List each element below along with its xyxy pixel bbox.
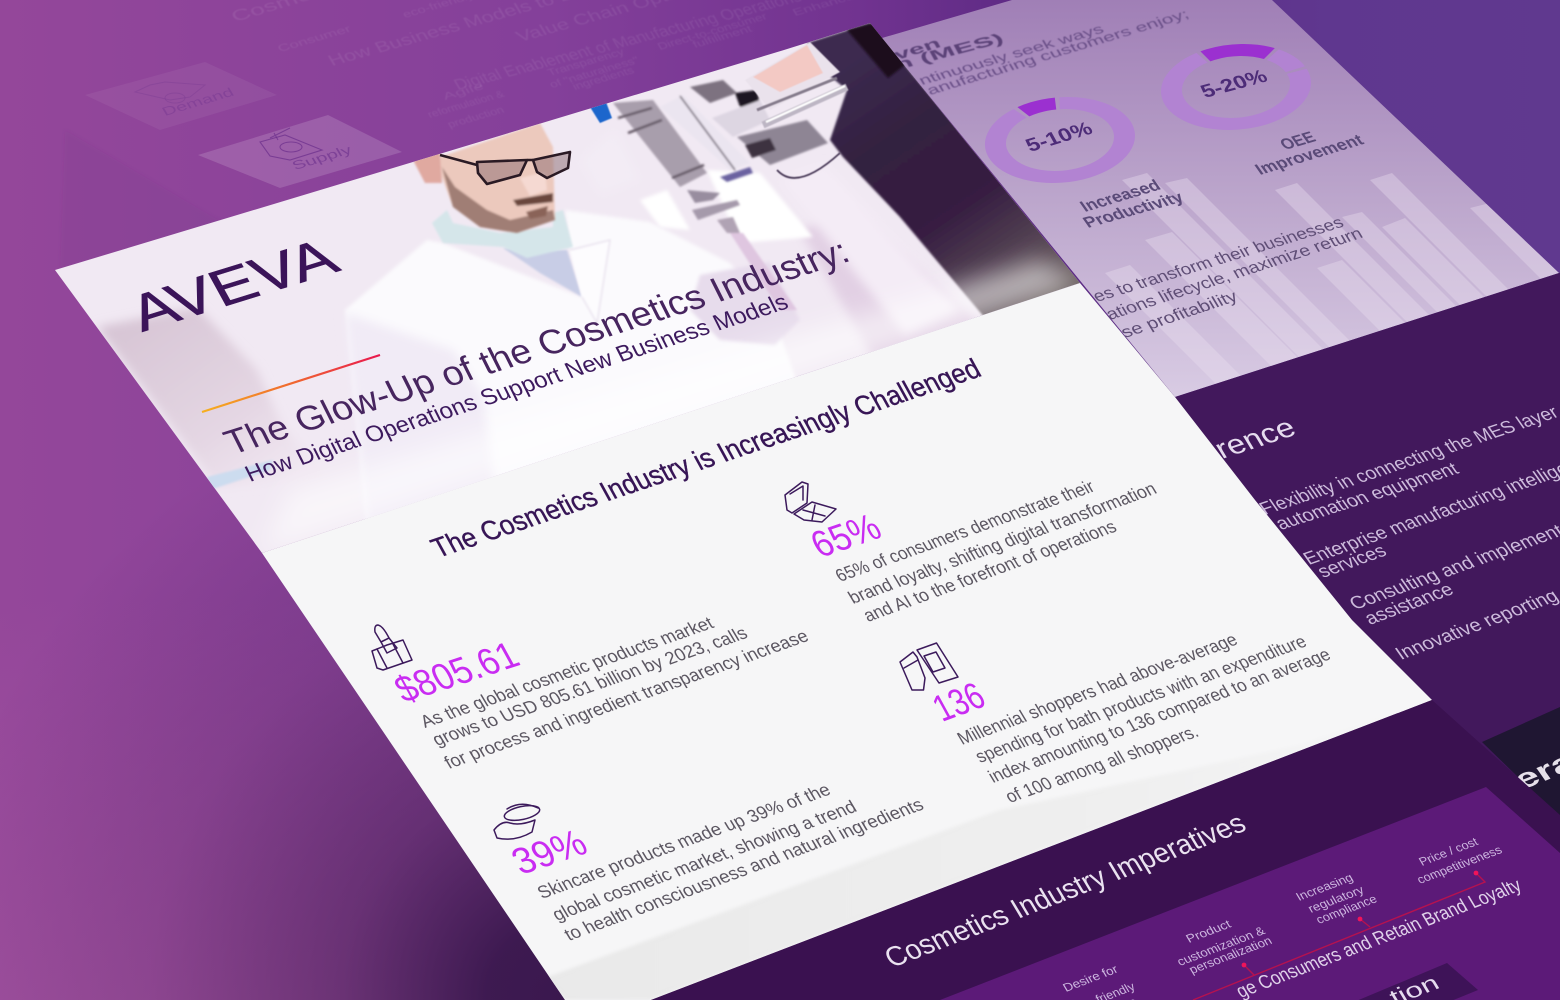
heading fragments: n (MES) xyxy=(890,30,1007,73)
stat: consumers: 65% of consumers demonstrate their xyxy=(831,476,1098,586)
imperative labels: customization & xyxy=(1175,924,1268,969)
capability list: Innovative reporting xyxy=(1391,585,1560,663)
donut: 5-20% xyxy=(1151,37,1321,137)
ghost sheet behind the main page xyxy=(60,0,857,300)
photo: face xyxy=(413,123,555,233)
ghost small labels: fulfillment xyxy=(691,24,755,51)
photo: face mask xyxy=(432,210,573,258)
photo: lab coat xyxy=(346,210,798,520)
stat: skincare xyxy=(494,779,927,945)
stat: millennial spending: index amounting to 136 compared to an average xyxy=(984,644,1334,787)
ghost card: demand xyxy=(85,62,277,130)
panel: lavender MES page xyxy=(882,0,1559,397)
label: OEE improvement: OEE xyxy=(1277,129,1319,154)
imperative labels: compliance xyxy=(1314,893,1380,927)
heading: Cosmetics Industry Imperatives xyxy=(879,807,1251,973)
capability list: automation equipment xyxy=(1271,459,1462,534)
imperative labels: Increasing xyxy=(1294,871,1356,904)
capability list xyxy=(1255,401,1560,663)
paragraph: ations lifecycle, maximize return xyxy=(1102,224,1366,324)
imperative connector line xyxy=(1193,873,1485,1000)
imperative labels: Desire for xyxy=(1061,963,1121,995)
stat: millennial spending: of 100 among all shoppers. xyxy=(1001,721,1202,807)
dark label box xyxy=(1330,963,1478,1000)
imperative labels: Product xyxy=(1184,917,1234,946)
heading: The Cosmetics Industry is Increasingly Challenged xyxy=(425,353,986,563)
stat: skincare: 39% xyxy=(504,821,594,882)
banner title: ge Consumers and Retain Brand Loyalty xyxy=(1232,875,1526,1000)
stat: market size: As the global cosmetic products market xyxy=(416,613,717,732)
photo: lab machine xyxy=(613,80,828,310)
heading fragments: ven xyxy=(891,36,944,64)
ghost card: supply xyxy=(198,115,402,188)
label: increased productivity xyxy=(1077,177,1188,232)
ghost small labels: of "naturalness" xyxy=(548,55,642,91)
subtitle: How Digital Operations Support New Business Models xyxy=(240,288,792,487)
stat: skincare: Skincare products made up 39% of the xyxy=(533,779,834,903)
heading fragments: anufacturing customers enjoy; xyxy=(923,6,1192,98)
donut: 5-10%: 5-10% xyxy=(1021,117,1097,156)
ghost headings xyxy=(228,0,805,94)
icon: cream jar xyxy=(494,803,541,839)
capability list: assistance xyxy=(1360,578,1457,628)
label: increased productivity: Increased xyxy=(1077,177,1164,216)
ghost small labels: Transparency xyxy=(546,47,627,79)
ghost small labels: reformulation & xyxy=(426,89,507,121)
heading fragments xyxy=(890,6,1192,98)
ghost headings: Digital Enablement of Manufacturing Operations xyxy=(451,0,805,94)
gradient rule xyxy=(202,355,380,412)
heading fragments: ntinuously seek ways xyxy=(915,21,1107,88)
stat: market size: grows to USD 805.61 billion by 2023, calls xyxy=(428,623,751,750)
inner panel xyxy=(940,787,1560,1000)
stat: skincare: to health consciousness and natural ingredients xyxy=(560,794,927,945)
photo: benchtop fade xyxy=(262,260,1080,553)
capability list: Flexibility in connecting the MES layer xyxy=(1255,401,1560,519)
title: The Glow-Up of the Cosmetics Industry: xyxy=(218,233,856,462)
stat: market size: $805.61 xyxy=(387,633,526,710)
ghost card: supply: Supply xyxy=(289,142,356,173)
heading: difference: rence xyxy=(1208,411,1301,464)
photo: room and window xyxy=(97,130,1000,490)
icon: lipstick xyxy=(372,625,412,670)
paragraph: se profitability xyxy=(1117,287,1242,342)
stat: millennial spending: 136 xyxy=(925,674,992,729)
ghost small labels: ingredients xyxy=(571,65,637,93)
ghost small labels: production xyxy=(446,105,507,131)
photo: dark corner xyxy=(807,22,1085,318)
imperative labels: Price / cost xyxy=(1417,835,1481,869)
ghost small labels xyxy=(276,0,857,131)
label: OEE improvement: Improvement xyxy=(1252,132,1368,179)
imperative labels: regulatory xyxy=(1306,883,1367,916)
panel: main page white section xyxy=(262,283,1432,1000)
stat: millennial spending: spending for bath products with an expenditure xyxy=(971,631,1310,767)
stat: millennial spending xyxy=(900,629,1334,807)
imperative labels xyxy=(1061,835,1505,1000)
stat: market size: for process and ingredient transparency increase xyxy=(440,626,812,773)
photo: arm, pipes and cable xyxy=(590,42,847,178)
icon: bottles xyxy=(900,643,958,690)
stat: consumers: 65% xyxy=(803,505,888,565)
stat: millennial spending: Millennial shoppers had above-average xyxy=(953,629,1241,749)
stat: consumers: and AI to the forefront of operations xyxy=(859,516,1120,626)
background bar pattern xyxy=(1106,173,1559,384)
ghost small labels: Direct-to-consumer xyxy=(656,11,770,53)
label: increased productivity: Productivity xyxy=(1080,189,1188,232)
stat: consumers: brand loyalty, shifting digital transformation xyxy=(844,478,1160,608)
dark block xyxy=(1482,707,1560,818)
imperative labels: personalization xyxy=(1187,934,1275,977)
donut: 5-20%: 5-20% xyxy=(1196,65,1271,102)
photo: glasses xyxy=(440,152,570,184)
paragraph xyxy=(1089,213,1366,342)
panel: main page photo header xyxy=(55,22,1085,560)
icon: compact xyxy=(785,482,836,522)
AVEVA logo: AVEVA xyxy=(118,227,348,342)
capability list: services xyxy=(1313,540,1390,581)
panel: cosmetics industry imperatives xyxy=(651,700,1560,1000)
donut: 5-10% xyxy=(975,90,1145,190)
ghost small labels: Agile xyxy=(441,81,487,103)
ghost card: demand: Demand xyxy=(159,85,237,119)
ghost small labels: Consumer xyxy=(276,24,355,55)
paragraph: es to transform their businesses xyxy=(1089,213,1347,306)
imperative labels: competitiveness xyxy=(1415,843,1505,887)
panel: dark difference page xyxy=(1080,273,1560,1000)
stat: skincare: global cosmetic market, showing a trend xyxy=(548,797,860,925)
